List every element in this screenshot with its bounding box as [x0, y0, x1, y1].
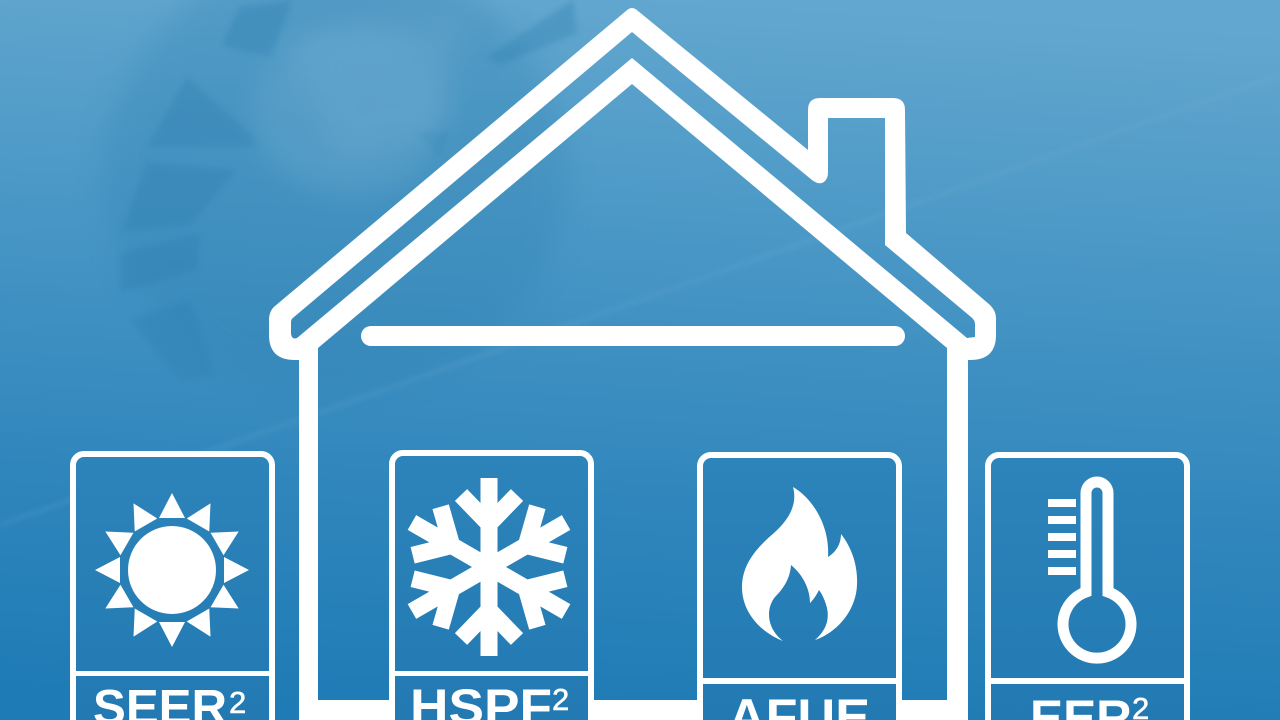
label: SEER2: 2	[229, 685, 246, 720]
house outline	[269, 8, 996, 720]
card: AFUE	[700, 455, 899, 720]
icon: snowflake	[398, 478, 580, 656]
icon: flame	[742, 487, 857, 641]
label: HSPF2: 2	[552, 682, 569, 717]
background: faded fan	[103, 0, 577, 393]
card: SEER2	[73, 454, 272, 720]
background: faint diagonal beam	[0, 75, 1280, 525]
icon: sun	[95, 493, 249, 647]
card: EER2	[988, 455, 1187, 720]
icon: thermometer	[1048, 482, 1131, 658]
attic floor bar	[361, 326, 905, 346]
card: HSPF2	[392, 453, 591, 720]
